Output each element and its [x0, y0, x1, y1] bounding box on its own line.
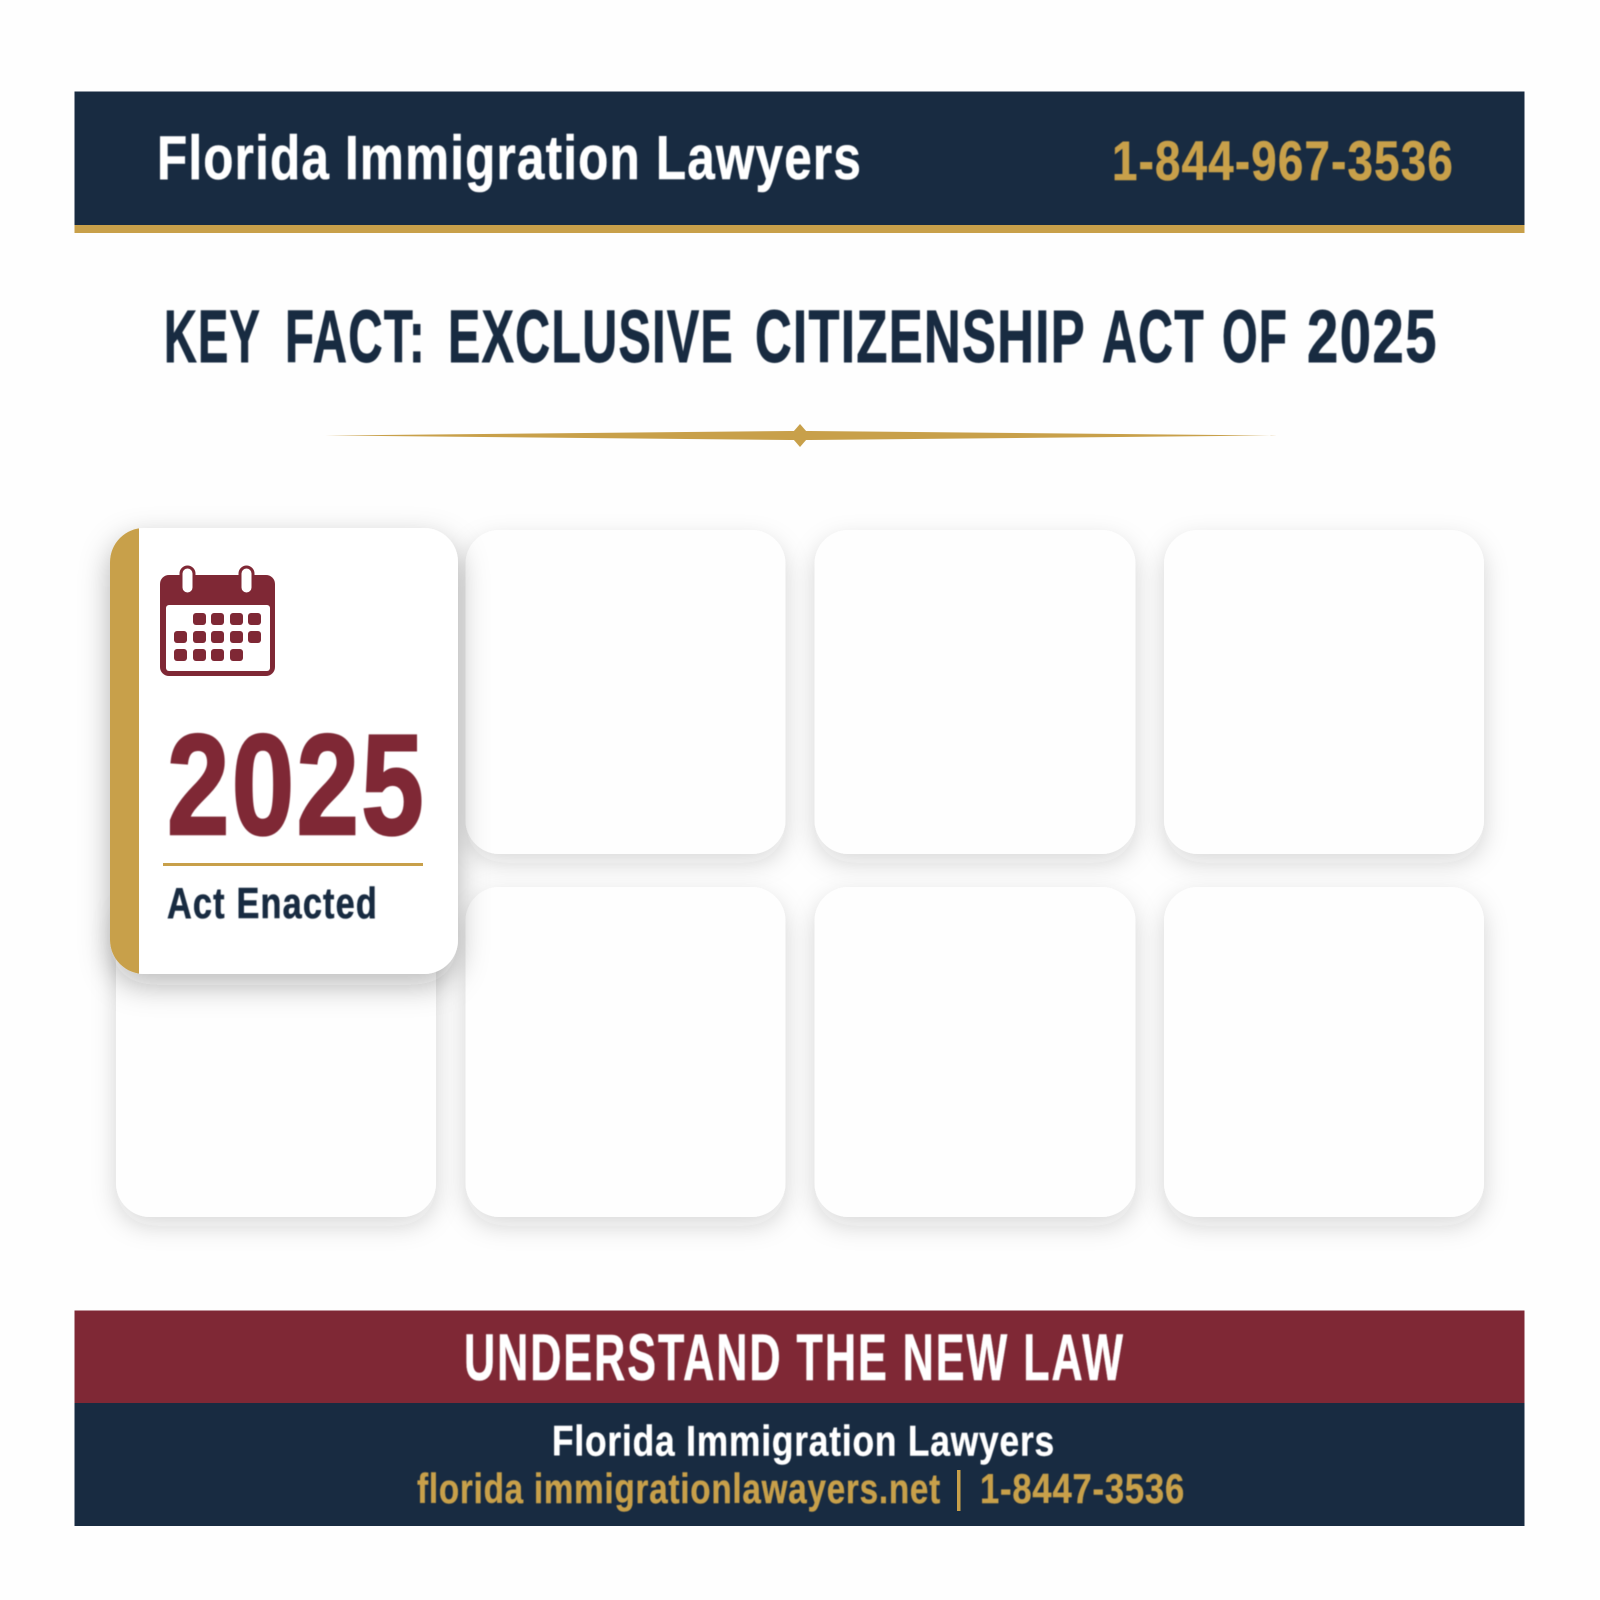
footer website: florida immigrationlawayers.net [417, 1465, 941, 1512]
header banner [74, 92, 1524, 233]
gold card edge [110, 528, 139, 974]
footer separator [957, 1470, 960, 1511]
panel: empty card row 2 column 2 [466, 887, 786, 1217]
title: 2025 [1307, 295, 1438, 378]
card label: Act Enacted [167, 879, 378, 928]
panel: empty card row 1 column 3 [814, 530, 1136, 854]
panel: empty card row 1 column 2 [466, 530, 786, 854]
title: EXCLUSIVE [448, 295, 734, 378]
header firm name: Florida Immigration Lawyers [157, 124, 862, 193]
header phone number: 1-844-967-3536 [1112, 129, 1454, 192]
panel: empty card row 1 column 4 [1164, 530, 1484, 854]
title: KEY [164, 295, 261, 378]
panel: empty card row 2 column 4 [1164, 887, 1484, 1217]
statistic: 2025: 2025 [167, 706, 426, 865]
footer headline: UNDERSTAND THE NEW LAW [464, 1320, 1125, 1394]
footer phone number: 1-8447-3536 [980, 1465, 1185, 1512]
title: OF [1222, 295, 1288, 378]
panel: empty card row 2 column 1 [116, 887, 436, 1217]
title: FACT: [285, 295, 426, 378]
title divider with diamond [325, 424, 1277, 447]
title: ACT [1102, 295, 1205, 378]
card rule [163, 863, 423, 866]
footer contact band [74, 1403, 1524, 1526]
icon: calendar [160, 567, 275, 676]
panel: empty card row 2 column 3 [814, 887, 1136, 1217]
footer call to action band [74, 1310, 1524, 1404]
footer firm name: Florida Immigration Lawyers [552, 1418, 1055, 1466]
title [164, 295, 1438, 378]
title: CITIZENSHIP [755, 295, 1086, 378]
panel: 2025 act enacted card [110, 528, 458, 974]
